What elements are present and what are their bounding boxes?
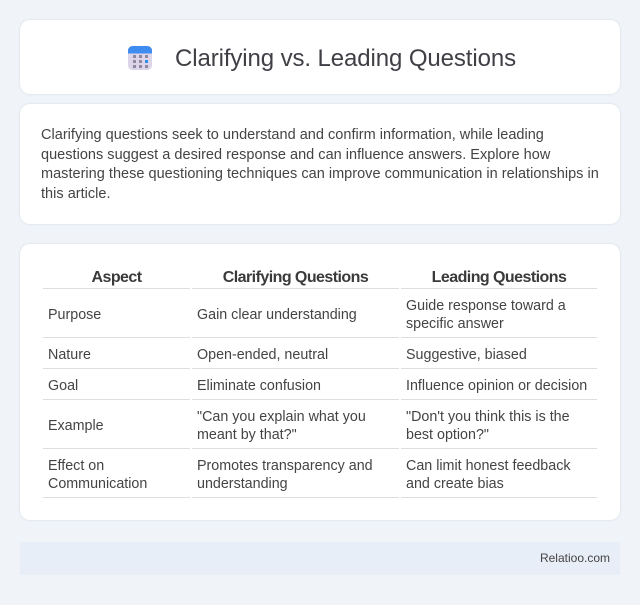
example leading: "Don't you think this is the	[406, 409, 570, 425]
nature clarifying: Open-ended, neutral	[197, 347, 328, 363]
row: purpose: Purpose	[48, 307, 101, 323]
goal clarifying: Eliminate confusion	[197, 378, 321, 394]
nature leading: Suggestive, biased	[406, 347, 527, 363]
row: nature: Nature	[48, 347, 91, 363]
table header: aspect: Aspect	[91, 269, 142, 286]
example clarifying: meant by that?"	[197, 427, 297, 443]
effect leading: Can limit honest feedback	[406, 458, 571, 474]
effect leading: and create bias	[406, 476, 504, 492]
effect clarifying: Promotes transparency and	[197, 458, 373, 474]
panel: title card	[20, 20, 620, 94]
text block: introduction	[41, 127, 599, 202]
text block: introduction: questions suggest a desired response and can influence answers. Explore how	[41, 147, 550, 163]
row: effect on communication	[48, 458, 147, 492]
row: goal: Goal	[48, 378, 78, 394]
text block: introduction: mastering these questioning techniques can improve communication in relationships in	[41, 166, 599, 182]
purpose clarifying: Gain clear understanding	[197, 307, 357, 323]
row: effect on communication: Effect on	[48, 458, 104, 474]
icon: calendar	[128, 46, 152, 70]
table header: leading questions: Leading Questions	[432, 269, 566, 286]
example clarifying: "Can you explain what you	[197, 409, 366, 425]
footer credit: Relatioo.com	[540, 551, 610, 565]
text block: introduction: this article.	[41, 186, 111, 202]
purpose leading: Guide response toward a	[406, 298, 566, 314]
example leading: best option?"	[406, 427, 489, 443]
row: effect on communication: Communication	[48, 476, 147, 492]
effect clarifying: understanding	[197, 476, 288, 492]
effect clarifying	[197, 458, 373, 492]
example clarifying	[197, 409, 366, 443]
example leading	[406, 409, 570, 443]
panel: introduction	[20, 104, 620, 224]
row: example: Example	[48, 418, 104, 434]
purpose leading	[406, 298, 566, 332]
title: Clarifying vs. Leading Questions	[175, 45, 516, 72]
footer bar	[20, 542, 620, 575]
text block: introduction: Clarifying questions seek to understand and confirm information, while leading	[41, 127, 544, 143]
effect leading	[406, 458, 571, 492]
table header: clarifying questions: Clarifying Questions	[223, 269, 368, 286]
goal leading: Influence opinion or decision	[406, 378, 587, 394]
purpose leading: specific answer	[406, 316, 504, 332]
panel: comparison table	[20, 244, 620, 520]
